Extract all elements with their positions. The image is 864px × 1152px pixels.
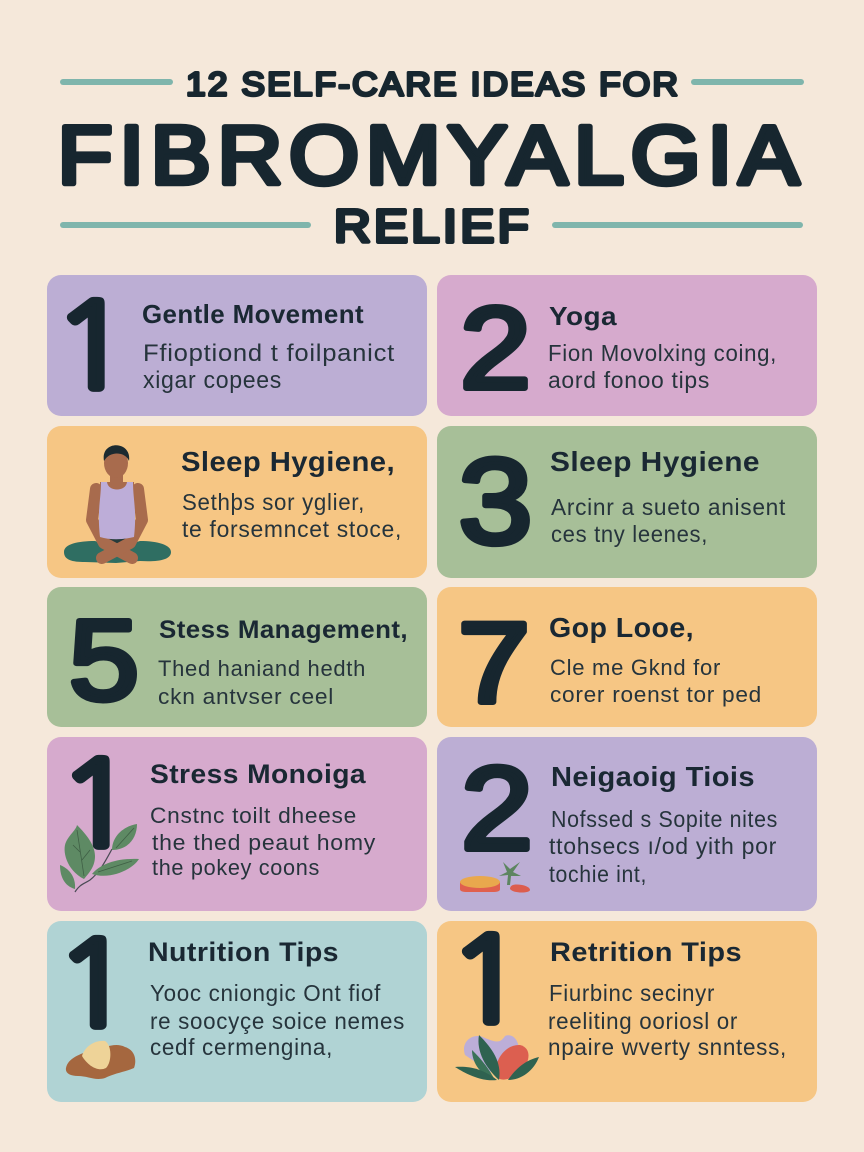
body text: xigar copees <box>143 367 282 394</box>
heading: Nutrition Tips <box>148 937 339 967</box>
number 2: 2 <box>460 283 531 413</box>
panel: gentle movement <box>47 275 427 416</box>
heading: Gop Looe, <box>549 612 694 643</box>
body text: Thed haniand hedth <box>158 656 366 681</box>
body text <box>549 806 778 887</box>
body text: ttohsecs ı/od yith por <box>549 833 777 859</box>
body text: Nofssed s Sopite nites <box>551 806 778 832</box>
panel: neigaoig tiois <box>437 737 817 911</box>
heading: Stess Management, <box>159 616 408 644</box>
body text <box>150 980 405 1060</box>
body text: npaire wverty snntess, <box>548 1034 787 1060</box>
body text: Cle me Gknd for <box>550 655 721 680</box>
body text: Ffioptiond t foilpanict <box>143 340 395 367</box>
panel: sleep hygiene left <box>47 426 427 578</box>
body text: cedf cermengina, <box>150 1034 333 1060</box>
body text: tochie int, <box>549 861 647 887</box>
body text: ces tny leenes, <box>551 521 708 547</box>
panel: stress monoiga <box>47 737 427 911</box>
number 1: 1 <box>447 922 527 1040</box>
number 5: 5 <box>69 598 139 724</box>
body text: reeliting ooriosl or <box>548 1008 738 1034</box>
title main word: FIBROMYALGIA <box>58 108 806 201</box>
body text: Sethþs sor yglier, <box>182 489 365 515</box>
panel: yoga <box>437 275 817 416</box>
body text: Fiurbinc secinyr <box>549 980 715 1006</box>
icon: seated person <box>64 445 171 563</box>
body text: re soocyçe soice nemes <box>150 1008 405 1034</box>
body text <box>143 340 395 394</box>
heading: Sleep Hygiene <box>550 446 760 477</box>
body text: aord fonoo tips <box>548 367 710 393</box>
heading: Stress Monoiga <box>150 759 367 789</box>
heading: Yoga <box>549 301 617 331</box>
body text <box>548 340 777 393</box>
heading: Neigaoig Tiois <box>551 761 755 792</box>
body text: the thed peaut homy <box>152 830 376 855</box>
heading: Retrition Tips <box>550 937 742 967</box>
number 1: 1 <box>57 746 137 864</box>
body text: ckn antvser ceel <box>158 684 334 709</box>
panel: gop looe <box>437 587 817 727</box>
number 3: 3 <box>458 433 532 569</box>
icon: potatoes <box>66 1041 135 1079</box>
panel: nutrition tips <box>47 921 427 1102</box>
body text: Yooc cniongic Ont fiof <box>150 980 381 1006</box>
body text: Cnstnc toilt dheese <box>150 803 357 828</box>
body text: the pokey coons <box>152 855 320 880</box>
body text: corer roenst tor ped <box>550 682 762 707</box>
panel: sleep hygiene right <box>437 426 817 578</box>
panel: stress management <box>47 587 427 727</box>
heading: Gentle Movement <box>142 299 364 329</box>
number 7: 7 <box>458 600 530 727</box>
title line 3: RELIEF <box>334 200 532 252</box>
heading: Sleep Hygiene, <box>181 446 395 477</box>
body text <box>182 489 402 542</box>
body text: te forsemncet stoce, <box>182 516 402 542</box>
icon: vegetables <box>455 1035 539 1080</box>
icon: food plate <box>460 862 530 892</box>
icon: leaves <box>60 824 139 892</box>
body text <box>158 656 366 709</box>
body text <box>551 494 786 547</box>
title <box>58 66 806 252</box>
body text: Fion Movolxing coing, <box>548 340 777 366</box>
body text <box>550 655 762 707</box>
number 1: 1 <box>54 926 134 1044</box>
panel: retrition tips <box>437 921 817 1102</box>
body text <box>548 980 787 1060</box>
body text <box>150 803 376 880</box>
number 2: 2 <box>461 743 533 875</box>
body text: Arcinr a sueto anisent <box>551 494 786 520</box>
title line 1: 12 SELF-CARE IDEAS FOR <box>186 66 680 104</box>
number 1: 1 <box>52 288 132 406</box>
